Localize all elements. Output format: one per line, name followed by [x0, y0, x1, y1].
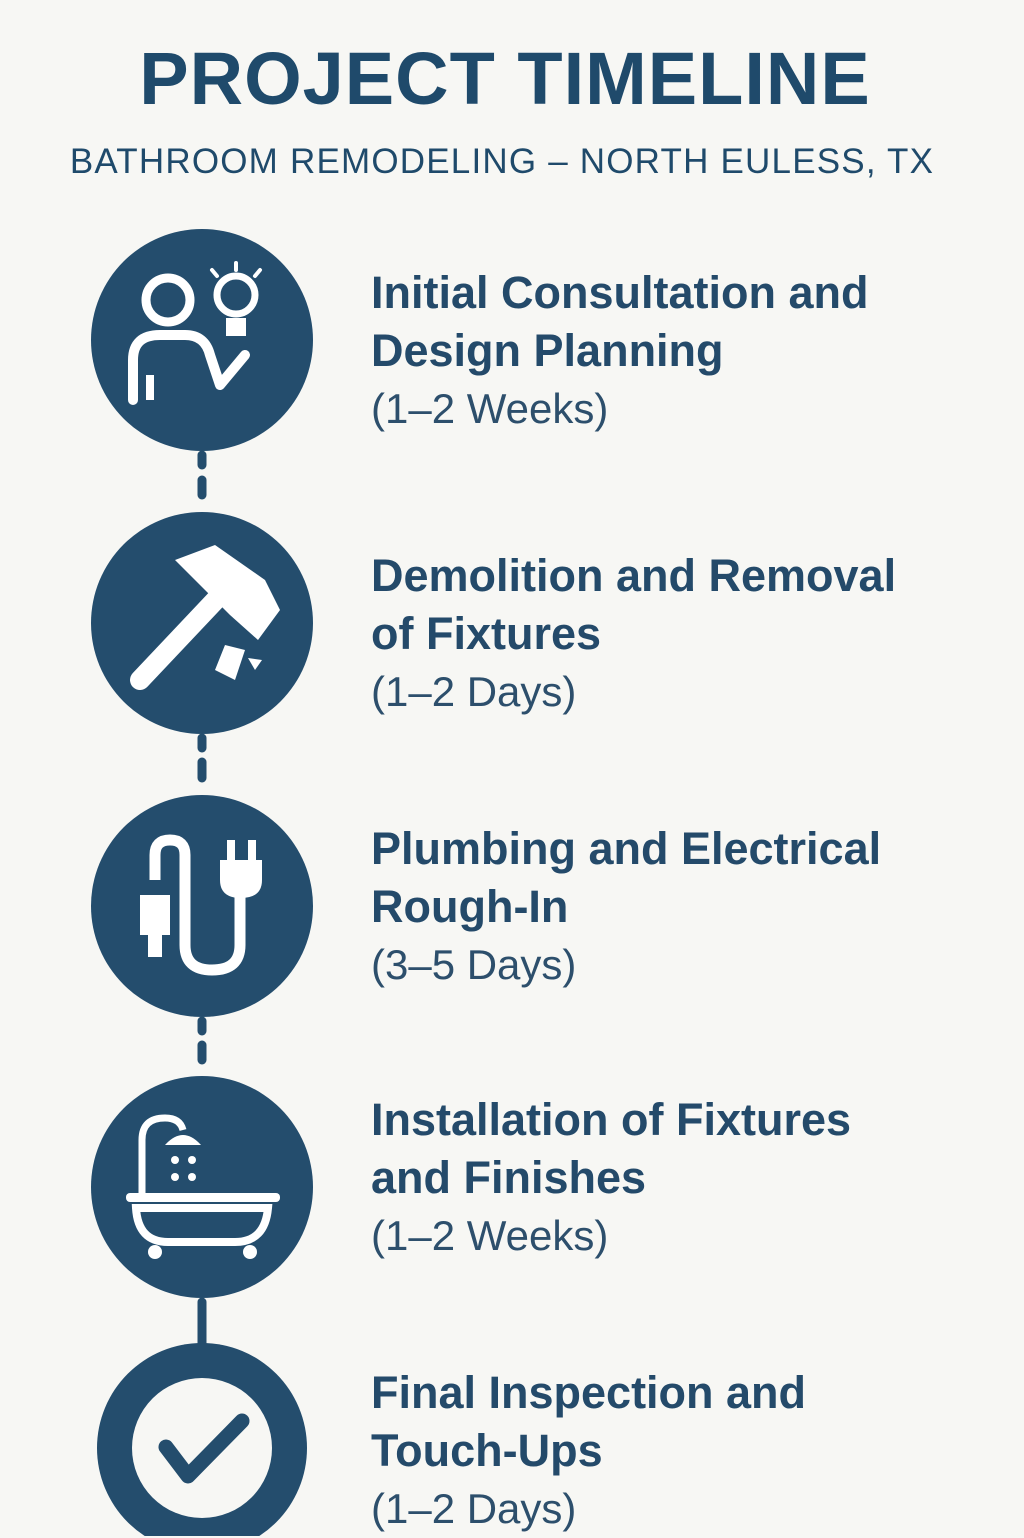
step 1 text: Initial Consultation and — [371, 267, 868, 318]
step 5 text — [371, 1367, 806, 1532]
step 1 text: Design Planning — [371, 325, 724, 376]
title: PROJECT TIMELINE — [139, 37, 871, 120]
icon: bathtub — [91, 1076, 313, 1298]
icon: hammer — [91, 512, 313, 734]
step 2 text: of Fixtures — [371, 608, 601, 659]
step 1 text — [371, 267, 868, 432]
step 3 text: Rough-In — [371, 881, 568, 932]
step 4 text: Installation of Fixtures — [371, 1094, 851, 1145]
step 4 text — [371, 1094, 851, 1259]
step 3 text: Plumbing and Electrical — [371, 823, 881, 874]
subtitle: BATHROOM REMODELING – NORTH EULESS, TX — [70, 142, 934, 181]
step 5 text: Touch-Ups — [371, 1425, 603, 1476]
step 3 text — [371, 823, 881, 988]
icon: plumbing and electrical — [91, 795, 313, 1017]
icon: consultation — [91, 229, 313, 451]
step 5 text: (1–2 Days) — [371, 1485, 576, 1532]
step 3 text: (3–5 Days) — [371, 941, 576, 988]
timeline icons — [91, 229, 313, 1536]
step 2 text: Demolition and Removal — [371, 550, 896, 601]
connector dashes — [198, 455, 206, 1350]
step 2 text — [371, 550, 896, 715]
step 5 text: Final Inspection and — [371, 1367, 806, 1418]
step 4 text: (1–2 Weeks) — [371, 1212, 608, 1259]
step 1 text: (1–2 Weeks) — [371, 385, 608, 432]
icon: checkmark — [97, 1343, 307, 1538]
step 2 text: (1–2 Days) — [371, 668, 576, 715]
step 4 text: and Finishes — [371, 1152, 646, 1203]
